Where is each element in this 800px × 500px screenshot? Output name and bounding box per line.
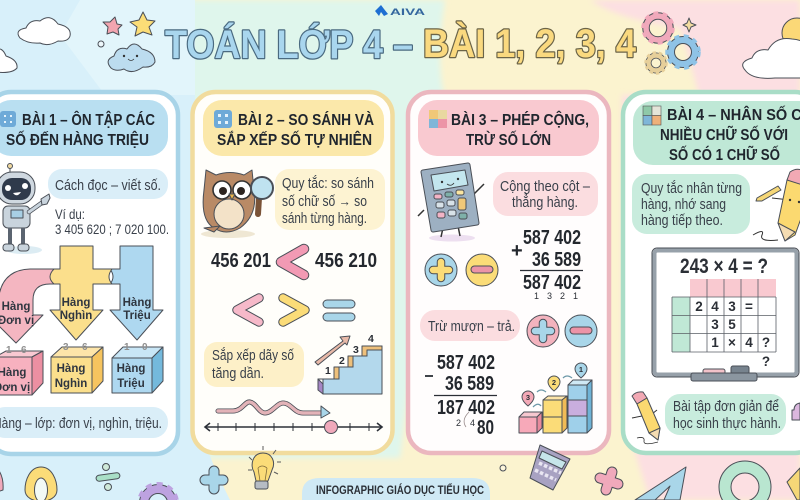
decoration: bottom left shapes	[0, 464, 177, 500]
chart: whiteboard: 5	[728, 317, 736, 332]
icon: stairs	[315, 333, 382, 394]
decoration: green ring	[725, 467, 765, 500]
callout: reading: Cách đọc – viết số.	[55, 178, 161, 194]
heading: lesson 1	[0, 100, 168, 156]
decoration: triangle ruler	[635, 467, 686, 500]
text: example	[55, 207, 169, 237]
callout: add by columns: thẳng hàng.	[512, 193, 578, 211]
arrow: place value flow	[0, 246, 163, 343]
panel 2	[192, 92, 392, 453]
panel 3	[408, 92, 609, 453]
callout: borrow	[420, 310, 520, 341]
chart: stacked blocks: 2	[552, 378, 556, 387]
icon: stairs: 3	[353, 344, 359, 356]
chart: addition example: 587 402	[523, 227, 581, 249]
chart: place value boxes: 3	[63, 342, 69, 353]
chart: whiteboard: 3	[711, 317, 719, 332]
chart: place value boxes: 0	[142, 342, 148, 353]
icon: owl with magnifier	[201, 170, 273, 238]
chart: subtraction example: 187 402	[437, 397, 495, 419]
heading: lesson 2: BÀI 2 – SO SÁNH VÀ	[238, 110, 374, 129]
chart: place value boxes: Hàng	[117, 363, 145, 375]
chart: stacked blocks: 3	[526, 393, 530, 402]
text: example: 3 405 620 ; 7 020 100.	[55, 222, 169, 237]
chart: subtraction example: 587 402	[437, 352, 495, 374]
callout: multiplication rule: hàng, nhớ sang	[641, 197, 726, 213]
decoration: sun and cloud	[743, 18, 800, 78]
heading: lesson 4: SỐ CÓ 1 CHỮ SỐ	[669, 144, 780, 164]
chart: addition example: 1 3 2 1	[534, 291, 578, 301]
heading: lesson 3: TRỪ SỐ LỚN	[466, 129, 551, 149]
chart: whiteboard: 243 × 4 = ?	[680, 255, 768, 278]
chart: whiteboard: 4	[745, 335, 753, 350]
callout: borrow: Trừ mượn – trả.	[428, 319, 515, 335]
callout: add by columns	[493, 172, 598, 216]
chart: addition example: 587 402	[523, 272, 581, 294]
callout: comparison rule: số chữ số → so	[282, 194, 367, 210]
heading: lesson 1: BÀI 1 – ÔN TẬP CÁC	[22, 110, 155, 129]
callout: add by columns: Cộng theo cột –	[500, 179, 591, 195]
chart: subtraction example: 4	[470, 418, 475, 428]
chart: stacked blocks: 1	[579, 365, 583, 374]
callout: reading	[48, 169, 168, 199]
chart: whiteboard	[652, 248, 799, 381]
icon: large pencil	[753, 169, 800, 241]
chart: addition example: +	[511, 240, 523, 262]
decoration: edge shape	[792, 403, 800, 420]
icon: small pencil	[632, 392, 660, 444]
callout: place and class	[0, 407, 168, 438]
icon: light bulb	[248, 446, 281, 489]
arrow: place value flow: Hàng	[123, 297, 151, 309]
icon: stairs: 1	[325, 365, 331, 377]
chart: whiteboard: ?	[762, 354, 770, 369]
callout: sort ascending: Sắp xếp dãy số	[212, 347, 294, 364]
chart: whiteboard: ?	[762, 335, 770, 350]
arrow: place value flow: Hàng	[62, 297, 90, 309]
chart: subtraction example: 2	[456, 418, 461, 428]
decoration: stars and smiling cloud	[98, 12, 155, 72]
icon: robot	[0, 164, 50, 254]
text: example: Ví dụ:	[55, 207, 85, 222]
decoration: blue plus	[205, 471, 223, 489]
logo: AIVA: AIVA	[390, 7, 425, 18]
callout: comparison rule: Quy tắc: so sánh	[282, 175, 374, 192]
callout: multiplication rule: Quy tắc nhân từng	[641, 180, 742, 197]
heading: lesson 2	[203, 100, 384, 156]
callout: comparison rule: sánh từng hàng.	[282, 211, 367, 227]
callout: sort ascending	[204, 342, 304, 387]
callout: practice	[665, 394, 786, 435]
title: BÀI 1, 2, 3, 4	[423, 21, 637, 66]
panel 4	[623, 92, 800, 453]
chart: addition example: 36 589	[532, 249, 581, 271]
chart: place value boxes	[0, 342, 163, 395]
chart: number line	[205, 420, 382, 434]
chart: stacked blocks	[519, 363, 592, 433]
decoration: yellow ruler	[787, 468, 800, 500]
icon: comparison signs	[237, 298, 355, 322]
arrow: place value flow: Nghìn	[60, 310, 92, 322]
heading: lesson 2: SẮP XẾP SỐ TỰ NHIÊN	[217, 129, 372, 149]
chart: place value boxes: Nghìn	[55, 378, 87, 390]
chart: place value boxes: 6	[82, 342, 88, 353]
icon: stairs: 4	[368, 333, 374, 345]
logo: AIVA	[375, 5, 425, 18]
chart: number comparison: 456 210	[315, 250, 377, 272]
decoration: gears	[643, 13, 699, 74]
callout: multiplication rule	[632, 174, 750, 234]
callout: sort ascending: tăng dần.	[212, 366, 264, 382]
heading: lesson 3	[418, 100, 599, 156]
chart: addition example	[511, 227, 583, 301]
icon: plus and minus	[425, 254, 498, 286]
chart: place value boxes: 1	[6, 345, 12, 356]
chart: subtraction example: 80	[477, 417, 494, 439]
title: TOÁN LỚP 4 –	[165, 21, 413, 67]
banner: footer	[302, 478, 490, 500]
arrow: place value flow: Triệu	[123, 310, 151, 322]
decoration: left clouds	[0, 18, 70, 73]
arrow: wavy order arrow	[218, 402, 330, 418]
heading: lesson 3: BÀI 3 – PHÉP CỘNG,	[451, 110, 589, 129]
icon: stairs: 2	[339, 355, 345, 367]
chart: place value boxes: Hàng	[57, 363, 85, 375]
chart: whiteboard: 4	[711, 299, 719, 314]
callout: multiplication rule: hàng tiếp theo.	[641, 213, 723, 229]
arrow: place value flow: Hàng	[2, 301, 30, 313]
chart: whiteboard: =	[745, 299, 753, 314]
chart: place value boxes: Triệu	[117, 378, 145, 390]
chart: place value boxes: 6	[21, 345, 27, 356]
chart: whiteboard: 1	[711, 335, 719, 350]
chart: whiteboard: 3	[728, 299, 736, 314]
panel 1	[0, 92, 178, 454]
chart: subtraction example	[425, 352, 497, 439]
callout: practice: học sinh thực hành.	[673, 416, 781, 432]
callout: comparison rule	[275, 169, 385, 230]
banner: footer: INFOGRAPHIC GIÁO DỤC TIỂU HỌC	[316, 484, 484, 497]
icon: plus and minus second	[527, 315, 597, 347]
title	[165, 21, 637, 67]
chart: place value boxes: 1	[124, 342, 130, 353]
heading: lesson 1: SỐ ĐẾN HÀNG TRIỆU	[6, 129, 149, 149]
decoration: bottom calculator	[500, 445, 570, 490]
heading: lesson 4	[633, 101, 800, 165]
callout: practice: Bài tập đơn giản để	[673, 399, 779, 415]
icon: calculator character	[418, 165, 484, 242]
chart: number comparison: 456 201	[211, 250, 271, 272]
chart: number comparison	[211, 249, 377, 275]
decoration: pink plus	[600, 472, 618, 490]
chart: whiteboard: 2	[695, 299, 703, 314]
chart: subtraction example: 36 589	[445, 373, 494, 395]
chart: whiteboard: ×	[728, 335, 736, 350]
